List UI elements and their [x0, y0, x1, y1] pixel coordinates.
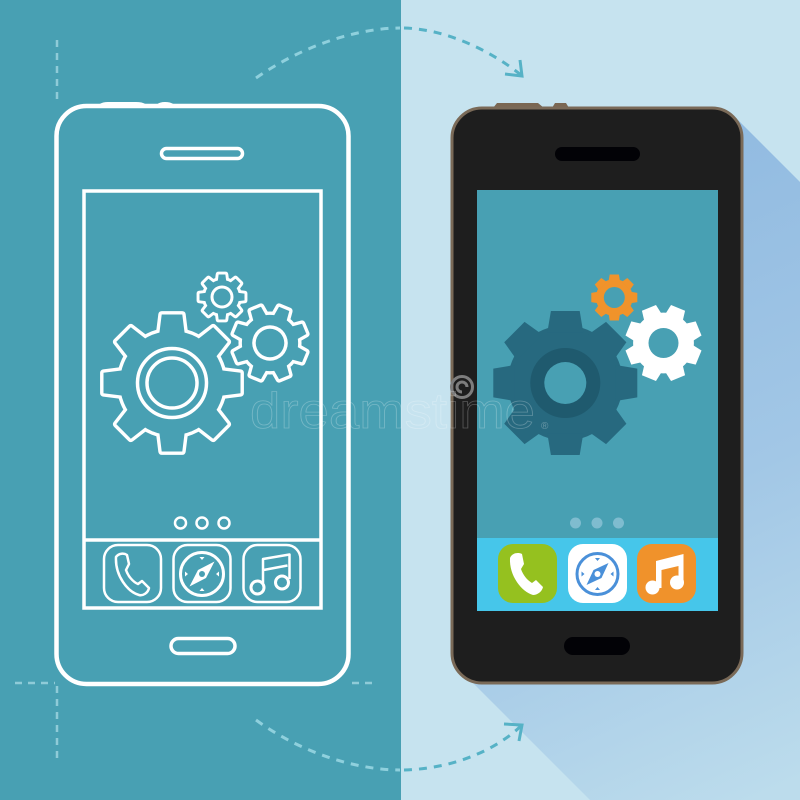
background: left panel	[0, 0, 401, 800]
outline screen	[84, 191, 321, 608]
outline medium gear	[202, 275, 338, 411]
outline page dots	[175, 518, 230, 528]
long phone shadow	[462, 112, 800, 800]
outline phone app icon	[104, 545, 161, 602]
watermark text: dreamstime	[250, 383, 535, 439]
arrow: bottom dashed arc	[256, 720, 522, 770]
flat speaker	[555, 147, 640, 161]
flat dock	[477, 538, 718, 611]
flat music app icon	[637, 544, 696, 603]
outline small gear	[190, 265, 254, 329]
background: right panel	[401, 0, 800, 800]
outline home button	[171, 638, 235, 654]
watermark	[250, 376, 549, 439]
arrow: top dashed arc	[256, 28, 522, 78]
outline large gear	[75, 286, 269, 480]
flat large gear	[463, 281, 667, 485]
outline dock divider	[84, 538, 321, 542]
flat orange gear	[582, 265, 647, 330]
outline phone	[56, 103, 348, 684]
blueprint guide lines	[15, 40, 374, 764]
watermark spiral logo	[452, 376, 472, 398]
watermark registered mark: ®	[541, 421, 549, 432]
flat phone	[452, 103, 742, 683]
flat phone body	[452, 108, 742, 683]
outline phone side buttons	[100, 103, 173, 105]
flat page dots	[570, 518, 624, 528]
flat phone app icon	[498, 544, 557, 603]
flat home button	[564, 637, 630, 655]
flat compass app icon	[568, 544, 627, 603]
outline speaker	[162, 148, 242, 158]
flat screen	[477, 190, 718, 540]
outline compass app icon	[174, 545, 230, 602]
outline phone body	[56, 106, 348, 684]
flat white gear	[593, 273, 734, 413]
outline music app icon	[244, 545, 300, 602]
flat phone side buttons	[493, 103, 569, 108]
